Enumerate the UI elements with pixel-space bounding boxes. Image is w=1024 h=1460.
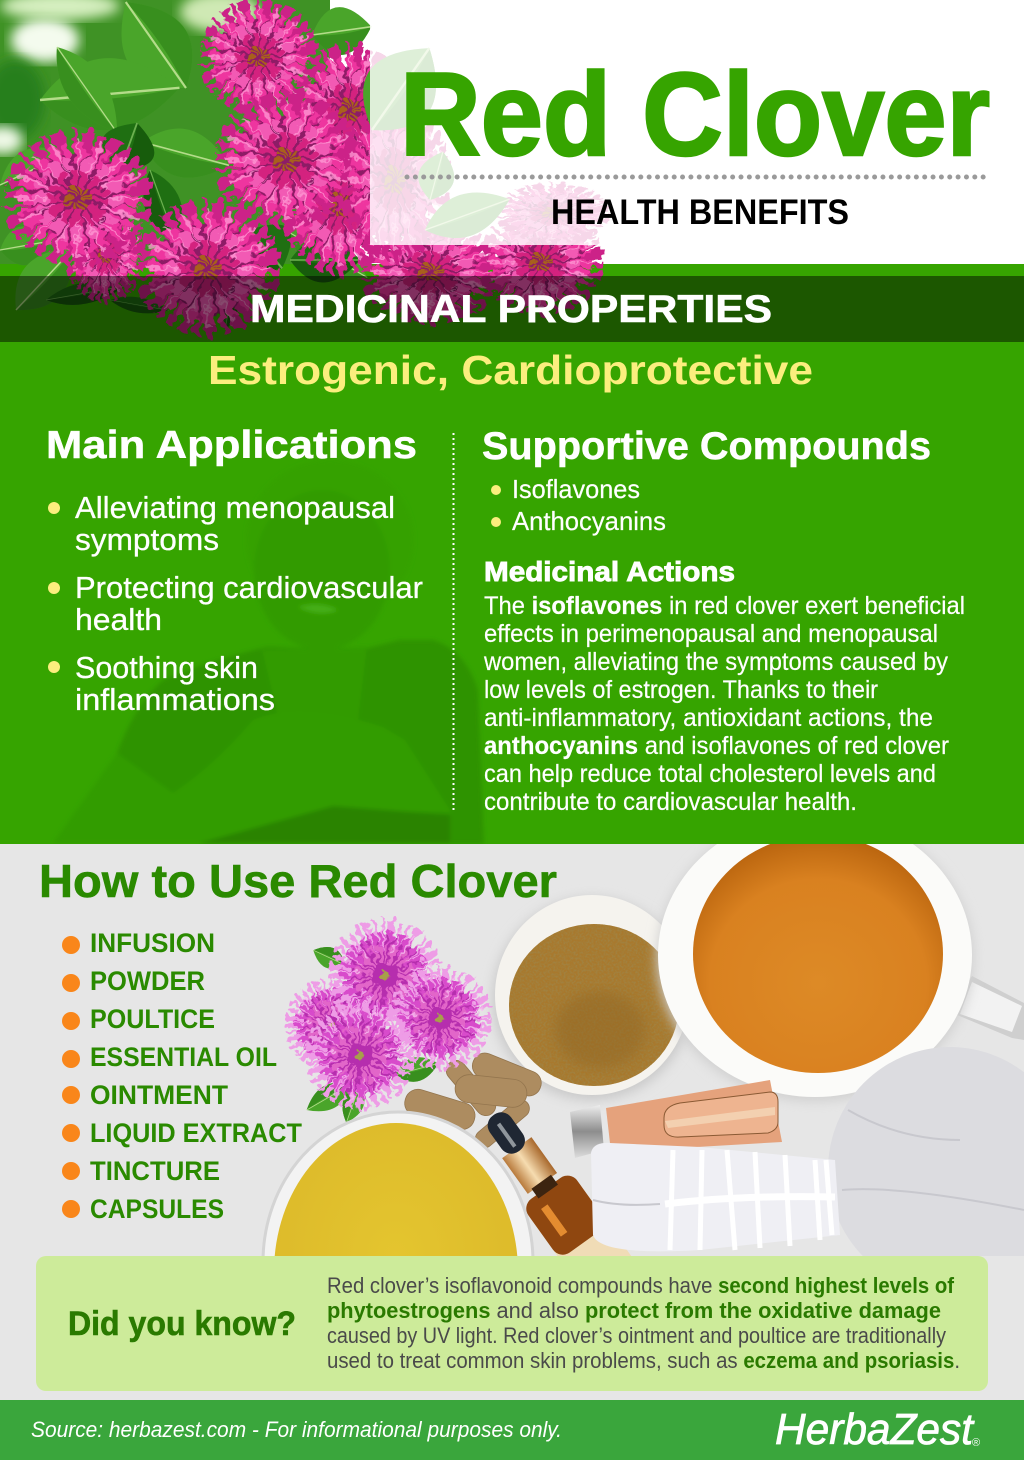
- form labels: CAPSULES: [90, 1194, 224, 1224]
- source note: Source: herbazest.com - For informational purposes only.: [31, 1417, 562, 1442]
- callout box: [36, 1256, 988, 1391]
- form labels: LIQUID EXTRACT: [90, 1118, 302, 1148]
- medicinal actions text: effects in perimenopausal and menopausal: [484, 620, 938, 648]
- application list: Soothing skin: [75, 650, 258, 685]
- application list: health: [75, 602, 162, 637]
- medicinal actions text: anti-inflammatory, antioxidant actions, the: [484, 704, 933, 732]
- callout text: phytoestrogens and also protect from the oxidative damage: [327, 1298, 941, 1323]
- panel: how to use background: [0, 844, 1024, 1400]
- subtitle: HEALTH BENEFITS: [551, 193, 849, 232]
- logo: HerbaZest: HerbaZest: [775, 1405, 975, 1454]
- icon: clover blossoms: [294, 929, 482, 1126]
- compound list: [491, 474, 666, 536]
- compound list: Isoflavones: [512, 474, 640, 504]
- icon: capsules: [401, 1049, 545, 1151]
- icon: dropper bottle: [488, 1112, 632, 1256]
- application list: Alleviating menopausal: [75, 490, 395, 525]
- dotted column divider: [452, 433, 454, 812]
- list: forms of use: [62, 928, 302, 1224]
- heading: Main Applications: [46, 424, 417, 467]
- form labels: INFUSION: [90, 928, 215, 958]
- title: Red Clover: [400, 49, 990, 181]
- medicinal actions text: contribute to cardiovascular health.: [484, 788, 857, 816]
- panel: main applications: [46, 424, 423, 717]
- callout text: caused by UV light. Red clover’s ointment and poultice are traditionally: [327, 1323, 946, 1348]
- medicinal actions text: anthocyanins and isoflavones of red clover: [484, 732, 949, 760]
- form labels: ESSENTIAL OIL: [90, 1042, 277, 1072]
- form labels: TINCTURE: [90, 1156, 220, 1186]
- application list: inflammations: [75, 682, 275, 717]
- footer: [0, 1400, 1024, 1460]
- bullets: [48, 502, 60, 673]
- form labels: POWDER: [90, 966, 205, 996]
- icon: powder in dish: [493, 895, 691, 1100]
- application list: symptoms: [75, 522, 219, 557]
- heading: how to use: How to Use Red Clover: [39, 855, 557, 907]
- properties line: Estrogenic, Cardioprotective: [208, 347, 813, 393]
- dotted divider: [407, 174, 990, 180]
- callout text: used to treat common skin problems, such as eczema and psoriasis.: [327, 1348, 960, 1373]
- callout text: Red clover’s isoflavonoid compounds have second highest levels of: [327, 1273, 955, 1298]
- medicinal actions text: women, alleviating the symptoms caused by: [483, 648, 948, 676]
- compound list: Anthocyanins: [512, 506, 666, 536]
- application list: [75, 490, 423, 717]
- icon: ointment jar: [262, 1110, 534, 1256]
- photo: red clover bunch: [0, 0, 600, 332]
- medicinal actions text: can help reduce total cholesterol levels and: [484, 760, 936, 788]
- form labels: POULTICE: [90, 1004, 215, 1034]
- medicinal actions text: [483, 592, 965, 816]
- orange bullets: [62, 936, 80, 1218]
- translucent white title panel: [370, 23, 1024, 245]
- footer bar: [0, 1400, 1024, 1460]
- callout text: [327, 1273, 960, 1373]
- form labels: OINTMENT: [90, 1080, 228, 1110]
- heading: Supportive Compounds: [482, 425, 931, 468]
- icon: cup of tea: [657, 813, 1024, 1101]
- dark properties band: [0, 276, 1024, 342]
- medicinal actions text: The isoflavones in red clover exert beneficial: [484, 592, 965, 620]
- background image: woman silhouette: [53, 460, 484, 844]
- icon: oil bottle: [570, 1080, 782, 1158]
- form labels: [90, 928, 302, 1224]
- panel: supportive compounds: [482, 425, 965, 816]
- callout heading: Did you know?: [68, 1305, 296, 1343]
- application list: Protecting cardiovascular: [75, 570, 423, 605]
- subheading: medicinal actions: Medicinal Actions: [484, 556, 735, 587]
- registered mark: ®: [972, 1437, 980, 1449]
- green band: [0, 264, 1024, 844]
- product photos: [62, 844, 1024, 1256]
- icon: herbal compress ball: [591, 1047, 1024, 1256]
- callout: did you know: [36, 1256, 988, 1391]
- medicinal actions text: low levels of estrogen. Thanks to their: [484, 676, 878, 704]
- heading: medicinal properties: MEDICINAL PROPERTIES: [250, 288, 772, 331]
